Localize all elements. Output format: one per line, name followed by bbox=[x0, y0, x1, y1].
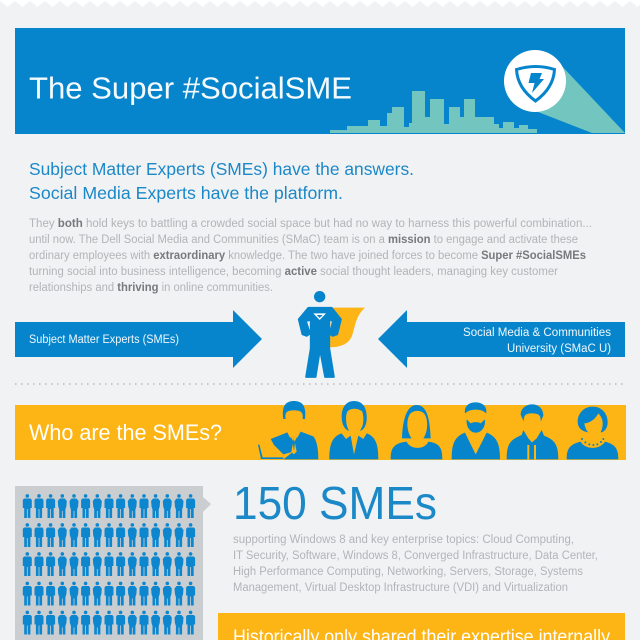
icon: man with laptop bbox=[258, 401, 318, 459]
icons: six SME portraits bbox=[258, 401, 618, 459]
text block: enterprise topics: High Performance Computing, Networking, Servers, Storage, Systems bbox=[233, 566, 583, 578]
icon: woman with short hair bbox=[329, 401, 378, 459]
text block: intro paragraph bbox=[29, 218, 592, 294]
arrow: Social Media and Communities University bbox=[378, 310, 625, 368]
heading: 150 SMEs: 150 SMEs bbox=[233, 477, 437, 529]
text block: intro paragraph: relationships and thriving in online communities. bbox=[29, 282, 273, 294]
text block: intro paragraph: They both hold keys to battling a crowded social space but had no way to harness this powerful combination... bbox=[29, 218, 592, 230]
title: The Super #SocialSME bbox=[29, 70, 352, 106]
panel: title banner bbox=[15, 28, 625, 134]
text block: intro paragraph: ordinary employees with extraordinary knowledge. The two have joined forces to become Super #SocialSMEs bbox=[29, 250, 586, 262]
callout: historically shared internally bbox=[218, 613, 625, 640]
icon: woman with necklace bbox=[567, 407, 618, 459]
icon: woman with long hair bbox=[391, 405, 442, 459]
dotted divider bbox=[15, 383, 625, 385]
icon: bearded man bbox=[452, 402, 500, 459]
skyline bbox=[330, 91, 537, 133]
arrow: Subject Matter Experts bbox=[15, 310, 262, 368]
panel: grey people grid bbox=[15, 486, 211, 640]
icon: shield badge bbox=[504, 50, 566, 112]
heading: intro statement bbox=[29, 159, 414, 203]
scalloped top edge bbox=[0, 0, 640, 8]
text block: intro paragraph: turning social into business intelligence, becoming active social thought leaders, managing key customer bbox=[29, 266, 558, 278]
icon: man in hoodie bbox=[507, 404, 558, 459]
icon: superhero figure with cape bbox=[299, 291, 365, 377]
text block: enterprise topics bbox=[233, 534, 598, 594]
heading: intro statement: Social Media Experts have the platform. bbox=[29, 183, 343, 203]
heading: intro statement: Subject Matter Experts (SMEs) have the answers. bbox=[29, 159, 414, 179]
arrow: Social Media and Communities University: Social Media & Communities bbox=[463, 327, 611, 339]
arrow: Subject Matter Experts: Subject Matter Experts (SMEs) bbox=[29, 334, 179, 346]
text block: enterprise topics: IT Security, Software, Windows 8, Converged Infrastructure, Data Center, bbox=[233, 550, 598, 562]
heading: Who are the SMEs: Who are the SMEs? bbox=[29, 420, 222, 445]
text block: enterprise topics: supporting Windows 8 and key enterprise topics: Cloud Computing, bbox=[233, 534, 574, 546]
arrow: Social Media and Communities University: University (SMaC U) bbox=[507, 343, 611, 355]
panel: Who are the SMEs band bbox=[15, 401, 626, 460]
text block: enterprise topics: Management, Virtual Desktop Infrastructure (VDI) and Virtualization bbox=[233, 582, 568, 594]
text block: intro paragraph: until now. The Dell Social Media and Communities (SMaC) team is on a mission to engage and activate these bbox=[29, 234, 578, 246]
chart: pictogram of 150 SMEs bbox=[23, 494, 195, 640]
spotlight beam bbox=[533, 62, 625, 133]
